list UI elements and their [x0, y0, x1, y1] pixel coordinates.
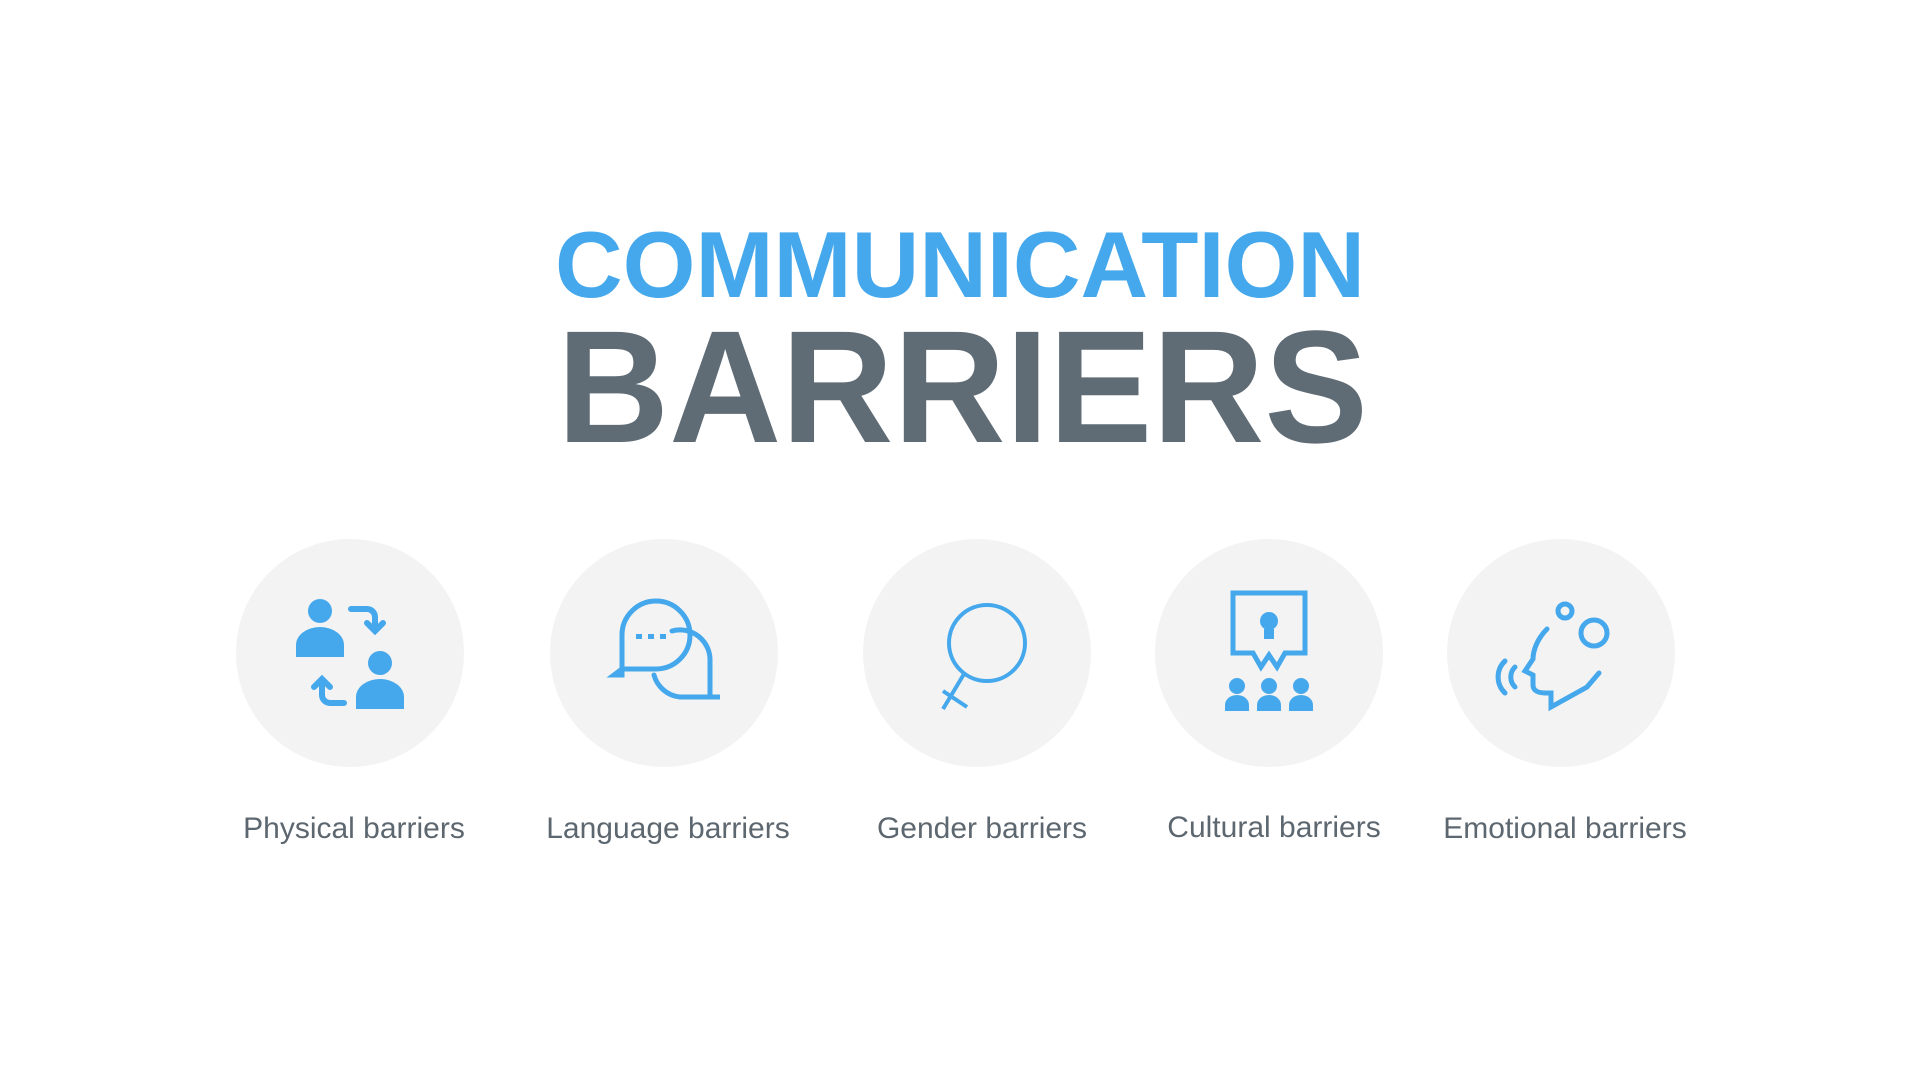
panel: gender — [863, 539, 1091, 767]
label: language: Language barriers — [546, 812, 790, 845]
panel: language — [550, 539, 778, 767]
title — [555, 212, 1368, 460]
panel: physical — [236, 539, 464, 767]
panel: cultural — [1155, 539, 1383, 767]
label: gender: Gender barriers — [877, 812, 1087, 845]
label: emotional: Emotional barriers — [1443, 812, 1687, 845]
label: physical: Physical barriers — [243, 812, 465, 845]
label: cultural: Cultural barriers — [1167, 811, 1381, 844]
panel: emotional — [1447, 539, 1675, 767]
title line 1: COMMUNICATION — [555, 212, 1365, 317]
